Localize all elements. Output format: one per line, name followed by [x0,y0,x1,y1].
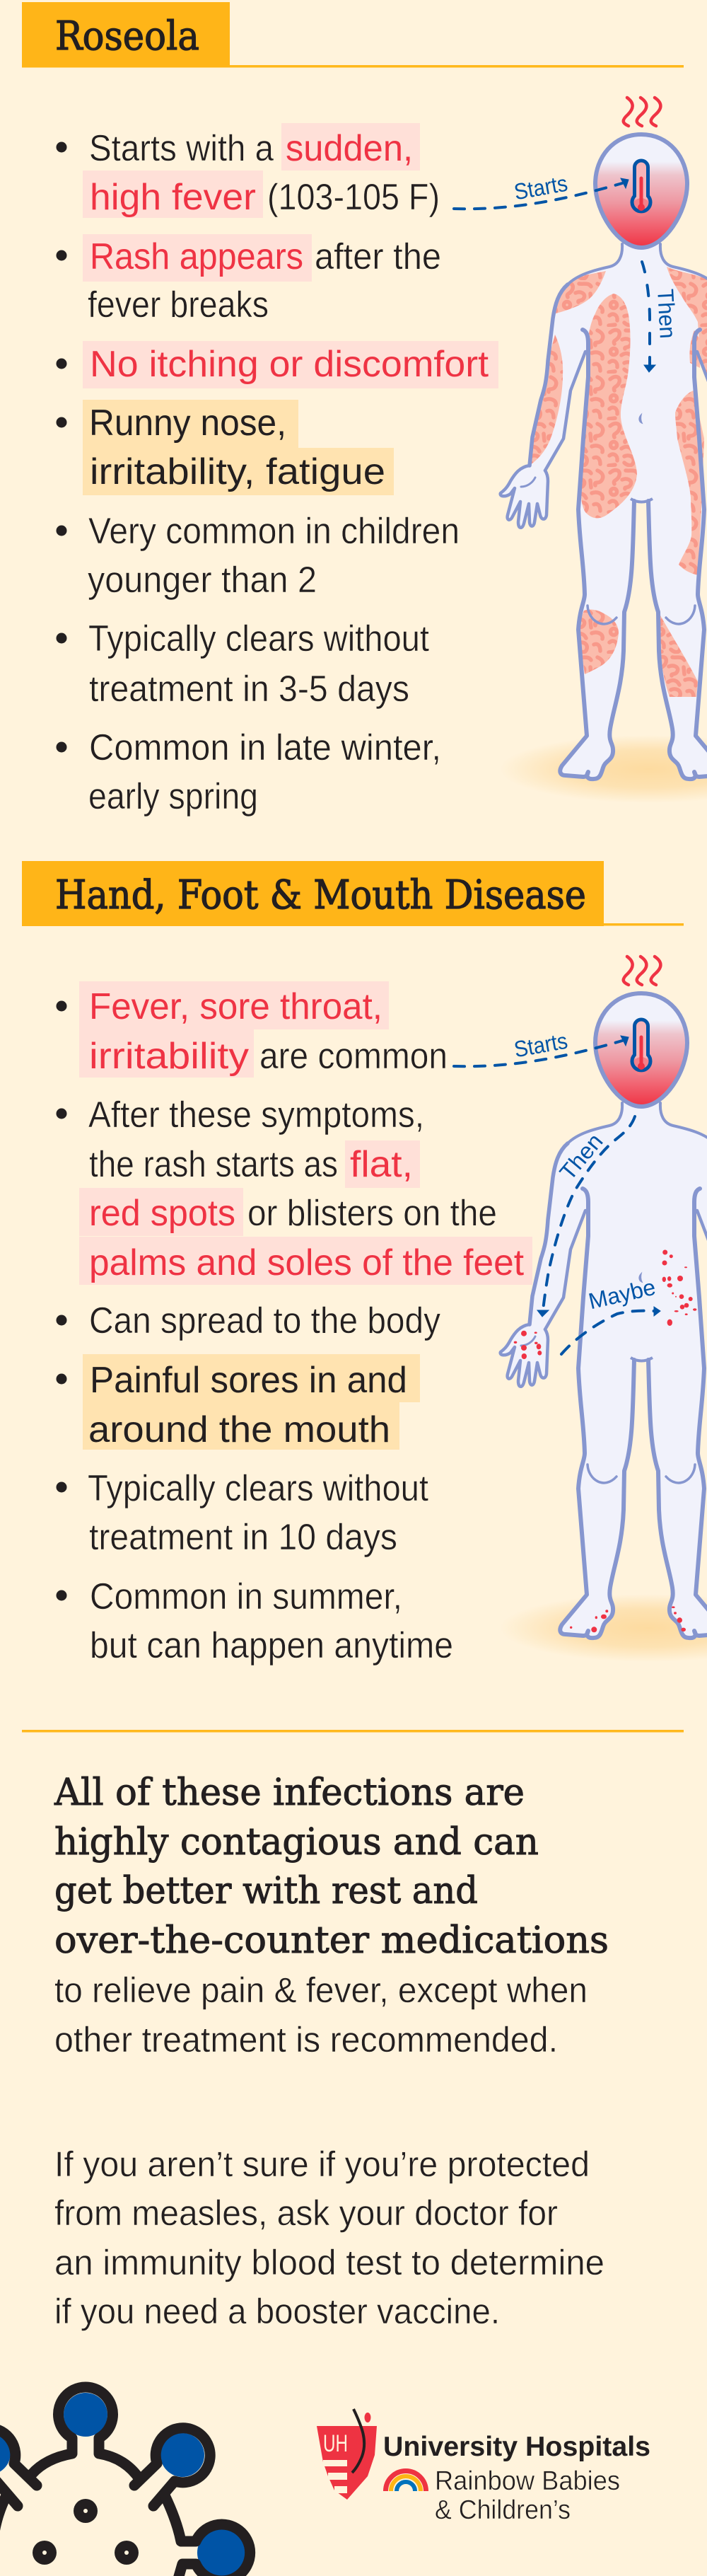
text block: contagious statement: All of these infections are [54,1772,525,1814]
logo: University Hospitals Rainbow Babies & Children's: & Children’s [435,2495,571,2525]
text block: measles booster advice: If you aren’t sure if you’re protected [54,2144,590,2184]
bullet: clears in 10 days: treatment in 10 days [89,1517,397,1558]
text block: contagious statement: over-the-counter medications [54,1919,609,1962]
bullet: season: early spring [88,776,258,817]
text block: contagious statement: other treatment is recommended. [54,2020,558,2060]
heading: Roseola: Roseola [55,13,199,59]
bullet: rash appears: after the [315,236,441,277]
bullet: rash appears [57,234,441,325]
bullet: very common [57,511,460,601]
bullet: summer: but can happen anytime [90,1625,453,1666]
arrow: starts: Starts [512,1028,569,1062]
bullet: rash spots: flat, [350,1144,413,1185]
icon: UH shield: UH [323,2430,348,2457]
text block: measles booster advice [54,2144,604,2331]
text block: contagious statement [54,1772,609,2060]
bullet: rash spots [57,1094,532,1285]
text block: contagious statement: get better with rest and [54,1870,478,1912]
bullet: clears in 3-5 days [57,618,429,710]
icon: UH shield [317,2409,377,2500]
bullet: fever [57,981,448,1078]
bullet: rash spots: or blisters on the [247,1193,497,1234]
text block: contagious statement: to relieve pain & fever, except when [54,1970,588,2010]
bullet: summer [57,1576,453,1666]
bullet: sudden high fever: sudden, [286,128,413,169]
bullet: no itching: No itching or discomfort [90,344,489,385]
bullet: fever: are common [259,1036,448,1077]
bullet: clears in 10 days [57,1468,428,1558]
heading: Roseola [22,2,684,68]
bullet: sudden high fever: Starts with a [89,128,274,169]
bullet: runny nose: Runny nose, [89,403,286,444]
bullet: rash spots: After these symptoms, [88,1094,424,1136]
icon: rainbow [386,2471,426,2491]
bullet: runny nose [57,400,394,495]
text block: measles booster advice: if you need a booster vaccine. [54,2292,500,2331]
bullet: clears in 3-5 days: treatment in 3-5 days [89,669,409,710]
bullet: can spread: Can spread to the body [89,1300,440,1341]
bullet: fever: irritability [89,1036,249,1077]
arrow: maybe: Maybe [586,1274,658,1314]
bullet: sudden high fever: high fever [90,177,256,218]
bullet: rash appears: fever breaks [88,284,269,325]
arrow: then: Then [554,1128,608,1185]
logo: University Hospitals Rainbow Babies & Children's: Rainbow Babies [435,2466,620,2496]
bullet: painful sores: Painful sores in and [90,1360,407,1401]
rash patches [530,267,707,697]
panel: Roseola symptoms list [57,123,498,817]
bullet: sudden high fever: (103-105 F) [267,177,440,218]
heading: Hand, Foot & Mouth Disease: Hand, Foot & Mouth Disease [55,872,586,918]
bullet: season [57,727,441,817]
logo: University Hospitals Rainbow Babies & Children's [317,2409,650,2525]
arrow: starts [454,171,629,209]
arrow: starts [454,1028,629,1066]
arrow: then [642,262,681,372]
heading: Hand, Foot & Mouth Disease [22,861,684,926]
logo: University Hospitals Rainbow Babies & Children's: University Hospitals [383,2432,650,2462]
text block: measles booster advice: from measles, ask your doctor for [54,2193,558,2233]
illustration: Roseola body with rash [454,98,707,803]
arrow: then [537,1116,635,1317]
arrow: maybe [561,1274,660,1354]
bullet: painful sores [57,1354,420,1450]
bullet: sudden high fever [57,123,440,218]
illustration: Hand, Foot & Mouth body with spots [454,957,707,1662]
panel: Hand, Foot & Mouth symptoms list [57,981,532,1666]
divider rule [22,1730,684,1732]
bullet: rash spots: the rash starts as [89,1144,338,1185]
bullet: fever: Fever, sore throat, [89,986,382,1027]
bullet: rash spots: palms and soles of the feet [89,1242,525,1283]
bullet: clears in 3-5 days: Typically clears without [88,618,429,659]
arrow: starts: Starts [512,171,569,204]
bullet: clears in 10 days: Typically clears without [88,1468,428,1509]
red spots [514,1249,696,1632]
arrow: then: Then [653,289,681,339]
bullet: runny nose: irritability, fatigue [90,451,385,492]
bullet: very common: younger than 2 [88,560,317,601]
bullet: rash spots: red spots [89,1193,235,1234]
bullet: season: Common in late winter, [89,727,441,768]
bullet: painful sores: around the mouth [88,1409,390,1450]
text block: contagious statement: highly contagious and can [54,1821,539,1864]
bullet: very common: Very common in children [88,511,460,552]
bullet: summer: Common in summer, [90,1576,402,1617]
icon: virus [0,2387,250,2576]
text block: measles booster advice: an immunity blood test to determine [54,2243,604,2282]
bullet: rash appears: Rash appears [90,236,303,277]
